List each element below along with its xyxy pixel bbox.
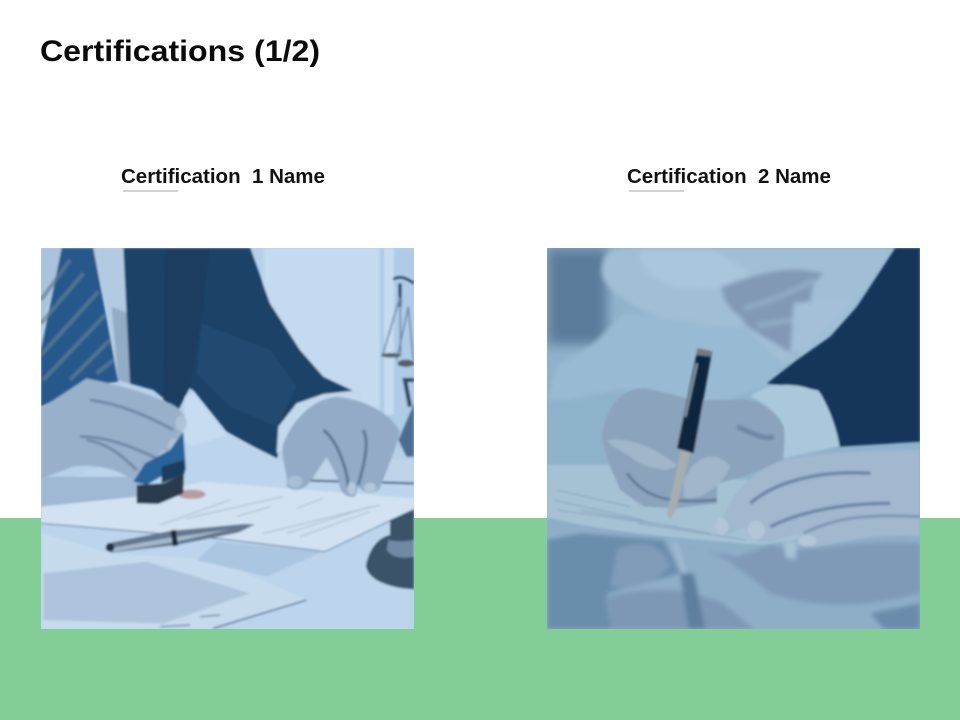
heading underline 2	[629, 190, 684, 192]
book under right hand	[322, 462, 393, 468]
green background band	[0, 518, 960, 720]
photo: hand signing with pen	[547, 248, 920, 629]
sleeve	[767, 248, 920, 447]
left hand	[41, 378, 186, 483]
pen	[106, 524, 255, 553]
heading underline 1	[123, 190, 178, 192]
right hand	[283, 397, 400, 497]
photo: hands stamping a document	[41, 248, 415, 629]
gavel	[366, 510, 414, 589]
background hand	[722, 270, 824, 357]
blurred dark background left	[547, 248, 607, 345]
shirt	[41, 248, 63, 327]
blurred white dress	[602, 248, 895, 365]
reflection on desk	[547, 533, 680, 629]
heading: certification 1 name: Certification 1 Name	[121, 165, 325, 188]
stamp	[133, 432, 186, 485]
tie	[41, 248, 118, 407]
paper 2	[41, 533, 307, 629]
seal mark	[178, 490, 206, 499]
cuff	[750, 385, 840, 458]
window wall	[261, 248, 380, 420]
heading: certification 2 name: Certification 2 Name	[627, 165, 831, 188]
desk	[41, 433, 414, 629]
desk top	[547, 464, 613, 496]
second hand	[717, 450, 920, 548]
cuff	[277, 390, 363, 453]
pen	[677, 348, 712, 453]
writing hand	[602, 388, 784, 508]
title: Certifications (1/2)	[40, 35, 320, 68]
paper	[556, 477, 799, 545]
scales	[383, 277, 414, 360]
suit	[123, 248, 360, 460]
paper 1	[41, 482, 414, 552]
